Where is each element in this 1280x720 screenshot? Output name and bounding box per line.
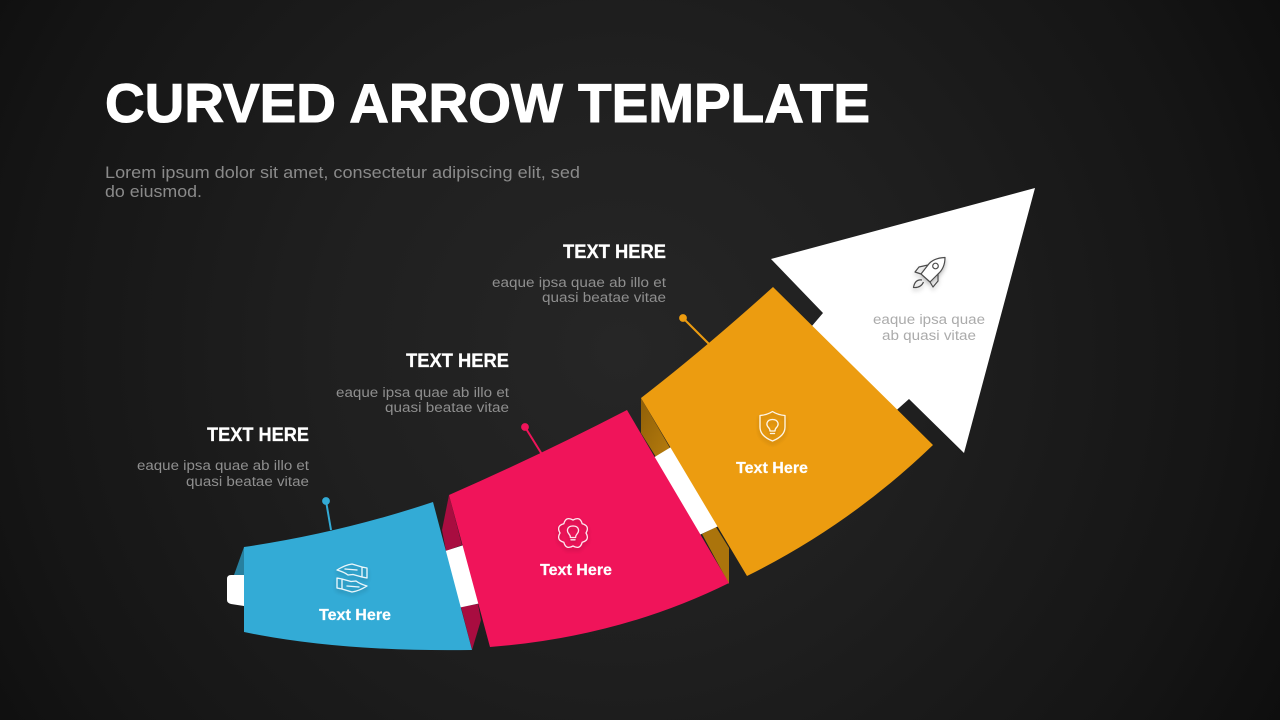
panel: orange segment bbox=[641, 287, 933, 576]
pin: red bbox=[522, 424, 543, 456]
arrow head bbox=[771, 188, 1035, 453]
callout: step 2 text bbox=[336, 350, 509, 415]
icon: gear bulb bbox=[559, 519, 587, 547]
pin: blue bbox=[323, 498, 331, 530]
label: red: Text Here bbox=[540, 562, 612, 579]
blue tail tab bbox=[227, 547, 244, 606]
panel: blue segment bbox=[244, 498, 472, 650]
subtitle text block: Lorem ipsum dolor sit amet, consectetur adipiscing elit, sed bbox=[105, 164, 580, 182]
callout: step 1 text bbox=[137, 424, 309, 489]
callout: step 1 text: eaque ipsa quae ab illo et bbox=[137, 458, 309, 473]
label: orange: Text Here bbox=[736, 460, 808, 477]
connector: blue to red bbox=[436, 495, 486, 650]
callout: step 1 text: TEXT HERE bbox=[207, 424, 309, 446]
callout: step 2 text: TEXT HERE bbox=[406, 350, 509, 372]
callout: step 3 text: quasi beatae vitae bbox=[542, 290, 666, 305]
connector: red to orange bbox=[641, 398, 729, 584]
callout: step 3 text bbox=[492, 241, 666, 305]
callout: step 1 text: quasi beatae vitae bbox=[186, 474, 309, 489]
pin: orange bbox=[680, 315, 711, 346]
icon: shield bulb bbox=[760, 412, 785, 441]
arrow head text bbox=[873, 312, 985, 343]
callout: step 3 text: eaque ipsa quae ab illo et bbox=[492, 275, 666, 290]
callout: step 3 text: TEXT HERE bbox=[563, 241, 666, 263]
title: CURVED ARROW TEMPLATE bbox=[105, 72, 870, 134]
callout: step 2 text: eaque ipsa quae ab illo et bbox=[336, 385, 509, 400]
callout: step 2 text: quasi beatae vitae bbox=[385, 400, 509, 415]
panel: red segment bbox=[449, 410, 729, 647]
icon: rocket bbox=[914, 258, 945, 288]
subtitle text block: do eiusmod. bbox=[105, 183, 202, 201]
arrow head text: ab quasi vitae bbox=[882, 328, 976, 343]
label: blue: Text Here bbox=[319, 607, 391, 624]
arrow head text: eaque ipsa quae bbox=[873, 312, 985, 327]
subtitle text block bbox=[105, 164, 580, 201]
icon: hands bbox=[337, 564, 367, 592]
